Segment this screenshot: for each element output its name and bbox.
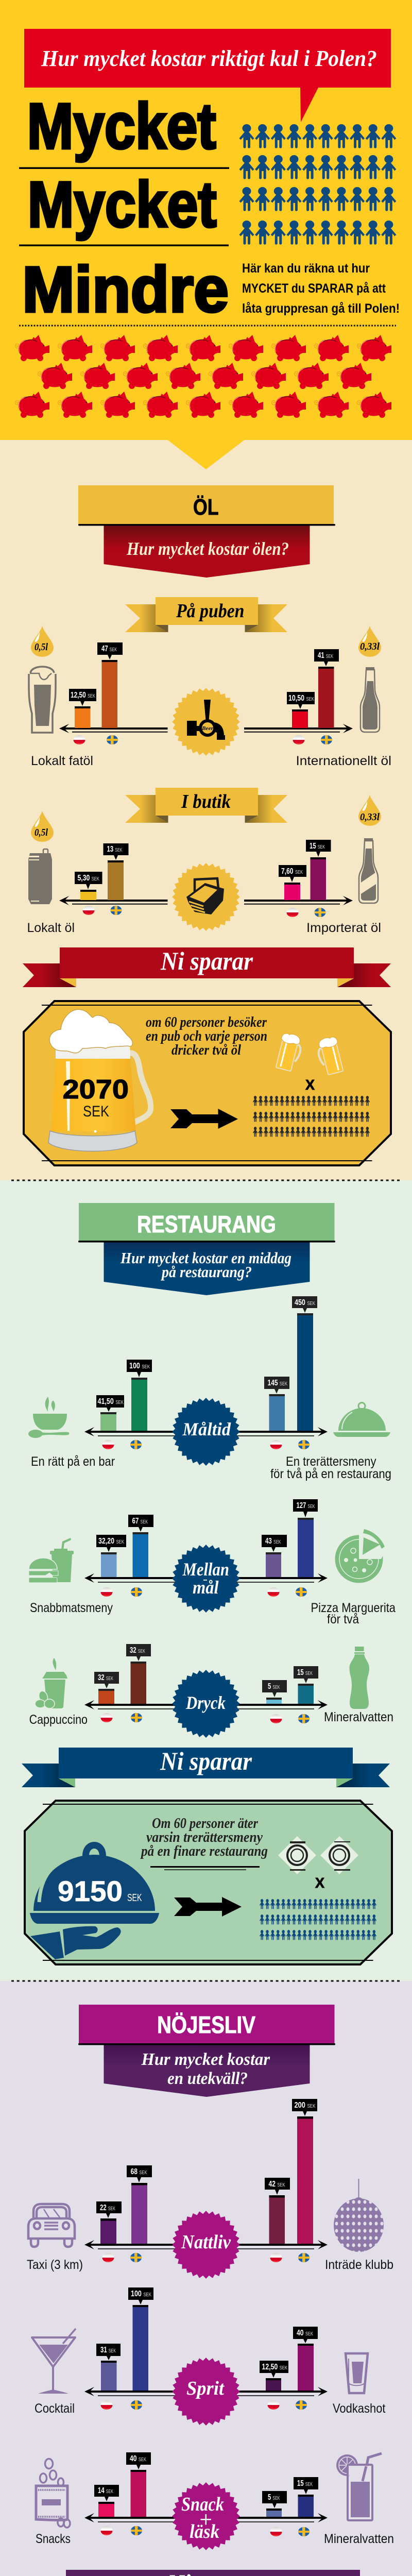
chart: Mellanmål xyxy=(29,1499,396,1626)
label: Inträde klubb: Inträde klubb xyxy=(325,2258,393,2272)
bar: taxi Polen 22 SEK: 22 SEK xyxy=(100,2204,115,2212)
bar: lokalt fatöl Sverige 47 SEK xyxy=(97,642,123,728)
bar: snacks Polen 14 SEK: 14 SEK xyxy=(98,2486,113,2495)
label: Internationellt öl: Internationellt öl xyxy=(296,754,391,768)
bar: lokalt öl Polen 5,30 SEK: 5,30 SEK xyxy=(77,874,99,883)
flags: Mellanmål xyxy=(101,1587,307,1597)
icon: waiter hand with cloche xyxy=(30,1842,159,1959)
chart: Dryck xyxy=(29,1644,393,1738)
ribbon: Ni sparar beer xyxy=(23,946,391,987)
bar: cocktail Polen 31 SEK: 31 SEK xyxy=(100,2346,116,2354)
icon: cocktail glass xyxy=(32,2329,76,2394)
badge: Snack + läsk: Snack xyxy=(181,2494,224,2515)
bar: importerat öl Sverige 15 SEK xyxy=(306,840,331,900)
bar: vodkashot Polen 12,50 SEK xyxy=(260,2361,288,2391)
axis: shop chart xyxy=(59,896,353,905)
badge: Sprit xyxy=(172,2358,240,2426)
question ribbon: nightlife: Hur mycket kostar xyxy=(141,2050,270,2069)
icon: burger and drink xyxy=(29,1538,74,1583)
bar: importerat öl Polen 7,60 SEK xyxy=(279,865,306,900)
bar: cocktail Sverige 100 SEK xyxy=(128,2287,153,2391)
badge: Nattliv xyxy=(172,2211,240,2279)
ribbon: Ni sparar beer: Ni sparar xyxy=(160,946,253,975)
chart: Sprit xyxy=(32,2287,386,2426)
label: En trerättersmeny för två xyxy=(270,1454,391,1481)
badge: Måltid: Måltid xyxy=(182,1419,231,1439)
question ribbon: beer: Hur mycket kostar ölen? xyxy=(126,538,289,559)
badge: Måltid xyxy=(172,1398,240,1466)
bar: mineralvatten Polen 5 SEK: 5 SEK xyxy=(268,1682,280,1691)
badge: Mellanmål: Mellan xyxy=(182,1559,229,1580)
bar: cappuccino Sverige 32 SEK: 32 SEK xyxy=(130,1646,145,1655)
explanation text xyxy=(140,1815,268,1859)
icon: cloche xyxy=(333,1402,390,1437)
bar: lokalt fatöl Sverige 47 SEK: 47 SEK xyxy=(101,645,117,653)
multiplier x: X xyxy=(305,1077,315,1093)
multiplier x: X xyxy=(315,1875,324,1891)
label: Taxi (3 km): Taxi (3 km) xyxy=(27,2258,83,2272)
main headline: Mindre xyxy=(22,254,229,326)
drop: 0,5 l xyxy=(31,626,54,657)
flags: Snack xyxy=(101,2526,310,2536)
question ribbon: nightlife: en utekväll? xyxy=(167,2069,248,2088)
intro text xyxy=(242,261,400,316)
section header: ÖL xyxy=(78,485,335,526)
badge: Mellanmål xyxy=(172,1545,240,1613)
explanation text: varsin trerättersmeny xyxy=(146,1829,263,1845)
bar: cocktail Sverige 100 SEK: 100 SEK xyxy=(131,2290,151,2298)
background: green restaurant section xyxy=(0,1180,412,1981)
bar: mineralvatten Polen 5 SEK xyxy=(262,1680,287,1704)
drop: 0,33 l xyxy=(358,626,381,657)
people: 66 persons xyxy=(260,1899,376,1940)
section header: RESTAURANG: RESTAURANG xyxy=(137,1211,276,1238)
flags: Sprit xyxy=(101,2400,307,2410)
bar: internationellt öl Sverige 41 SEK xyxy=(314,649,339,728)
bar: internationellt öl Polen 10,50 SEK: 10,50 SEK xyxy=(288,694,314,703)
drop: 0,33 l: 0,33l xyxy=(360,641,380,652)
label: Lokalt fatöl: Lokalt fatöl xyxy=(31,754,93,768)
bar: klubb Sverige 200 SEK xyxy=(292,2099,317,2244)
label: Pizza Marguerita för två xyxy=(311,1601,396,1626)
bar: importerat öl Sverige 15 SEK: 15 SEK xyxy=(310,842,325,851)
badge: Mellanmål: mål xyxy=(193,1577,218,1598)
bar: cocktail Polen 31 SEK xyxy=(96,2344,121,2391)
question ribbon: beer xyxy=(104,526,310,578)
bar: cappuccino Polen 32 SEK: 32 SEK xyxy=(98,1673,113,1682)
bar: klubb Polen 42 SEK xyxy=(265,2178,290,2244)
bar: snacks Sverige 40 SEK: 40 SEK xyxy=(130,2454,146,2463)
bar: lokalt fatöl Polen 12,50 SEK: 12,50 SEK xyxy=(71,691,95,700)
section header: NÖJESLIV: NÖJESLIV xyxy=(157,2011,255,2038)
bar: internationellt öl Polen 10,50 SEK xyxy=(287,692,315,728)
bar: en rätt Polen 41,50 SEK: 41,50 SEK xyxy=(98,1397,124,1406)
bar: cappuccino Sverige 32 SEK xyxy=(126,1644,151,1704)
icon: water bottle xyxy=(349,1647,369,1709)
bar: pizza Sverige 127 SEK xyxy=(293,1499,318,1577)
intro text: Här kan du räkna ut hur xyxy=(242,261,370,276)
icon: bottle xyxy=(360,667,380,732)
panel: beer savings xyxy=(24,1001,391,1165)
icon: taxi car xyxy=(28,2204,75,2247)
bar: vodkashot Sverige 40 SEK: 40 SEK xyxy=(297,2329,313,2337)
badge: Snack + läsk: läsk xyxy=(190,2521,219,2543)
speech bubble title: Hur mycket kostar riktigt kul i Polen? xyxy=(41,46,377,71)
bar: snabbmat Sverige 67 SEK xyxy=(128,1515,153,1577)
bar: cappuccino Polen 32 SEK xyxy=(94,1672,119,1704)
bar: mineralvatten Polen 5 SEK: 5 SEK xyxy=(268,2493,280,2502)
icon: coffee cup and beans xyxy=(35,1658,67,1708)
explanation text: en pub och varje person xyxy=(146,1028,267,1044)
icon: beer can xyxy=(28,849,52,904)
ribbon: Ni sparar restaurant xyxy=(22,1747,390,1787)
drop: 0,5 l shop xyxy=(31,811,54,842)
bar: trerätters Sverige 450 SEK xyxy=(292,1296,317,1431)
bar: pizza Sverige 127 SEK: 127 SEK xyxy=(297,1501,315,1510)
background: cream beer section xyxy=(0,440,412,1180)
people: 66 persons xyxy=(253,1096,370,1137)
label: Snabbmatsmeny: Snabbmatsmeny xyxy=(30,1601,113,1615)
badge: Sprit: Sprit xyxy=(186,2378,225,2399)
bar: importerat öl Polen 7,60 SEK: 7,60 SEK xyxy=(281,867,303,876)
drop: 0,5 l: 0,5l xyxy=(35,641,48,653)
ribbon: På puben xyxy=(125,597,287,632)
badge: shopping basket xyxy=(172,863,240,931)
badge: Dryck: Dryck xyxy=(185,1692,226,1713)
explanation text: om 60 personer besöker xyxy=(146,1014,267,1030)
bar: mineralvatten Sverige 15 SEK xyxy=(294,1666,318,1704)
explanation text: på en finare restaurang xyxy=(140,1843,268,1859)
background: lavender nightlife section xyxy=(0,1981,412,2576)
flags: Måltid xyxy=(102,1440,310,1449)
label: En trerättersmeny för två: för två på en restaurang xyxy=(270,1467,391,1481)
main headline: Mycket xyxy=(28,169,216,241)
bar: en rätt Sverige 100 SEK: 100 SEK xyxy=(129,1362,150,1370)
icon: big beer mug xyxy=(48,1009,151,1151)
question ribbon: restaurant: Hur mycket kostar en middag xyxy=(120,1249,291,1267)
icon: two plates xyxy=(278,1836,358,1874)
bar: internationellt öl Sverige 41 SEK: 41 SEK xyxy=(318,651,333,660)
ribbon: I butik xyxy=(125,788,287,823)
section header: NÖJESLIV xyxy=(78,2005,335,2045)
icon: clinking mugs xyxy=(274,1032,345,1076)
bar: lokalt öl Polen 5,30 SEK xyxy=(75,872,102,900)
bar: klubb Polen 42 SEK: 42 SEK xyxy=(269,2180,285,2189)
label: Cocktail: Cocktail xyxy=(35,2401,75,2416)
bar: snacks Polen 14 SEK xyxy=(94,2485,119,2517)
label: En rätt på en bar: En rätt på en bar xyxy=(31,1454,115,1469)
intro text: MYCKET du SPARAR på att xyxy=(242,281,386,296)
bar: lokalt öl Sverige 13 SEK: 13 SEK xyxy=(107,845,123,854)
bar: lokalt öl Sverige 13 SEK xyxy=(103,843,129,900)
badge: Snack + läsk xyxy=(172,2482,240,2550)
people grid: 40 travellers xyxy=(239,124,396,245)
background: yellow top section xyxy=(0,0,412,440)
explanation text: dricker två öl xyxy=(171,1042,241,1058)
flags: shop chart xyxy=(82,906,325,917)
bar: pizza Polen 43 SEK: 43 SEK xyxy=(265,1537,281,1546)
label: Mineralvatten: Mineralvatten xyxy=(324,2532,394,2546)
bar: vodkashot Sverige 40 SEK xyxy=(293,2327,318,2391)
panel: restaurant savings xyxy=(25,1801,392,1964)
flags: Nattliv xyxy=(102,2253,310,2262)
piggy banks xyxy=(15,335,391,418)
arrow xyxy=(174,1897,242,1917)
question ribbon: restaurant xyxy=(104,1243,310,1295)
chart: Nattliv xyxy=(27,2099,393,2279)
drop: 0,33 l shop xyxy=(358,795,381,826)
ribbon: I butik: I butik xyxy=(181,791,231,812)
badge: beer tap: Beer xyxy=(201,725,214,732)
arrow xyxy=(170,1109,238,1129)
icon: imported beer bottle xyxy=(359,838,378,903)
label: Vodkashot: Vodkashot xyxy=(333,2401,386,2416)
question ribbon: restaurant: på restaurang? xyxy=(160,1263,252,1281)
bar: en rätt Sverige 100 SEK xyxy=(127,1360,152,1431)
amount: 2070 SEK: 2070 xyxy=(63,1075,129,1105)
label: Snacks: Snacks xyxy=(36,2532,71,2546)
drop: 0,5 l shop: 0,5l xyxy=(35,827,48,838)
amount: 9150 SEK: SEK xyxy=(127,1892,142,1904)
label: Importerat öl: Importerat öl xyxy=(306,921,381,935)
ribbon: Ni sparar nightlife xyxy=(29,2569,397,2576)
question ribbon: nightlife xyxy=(104,2045,310,2097)
bar: trerätters Sverige 450 SEK: 450 SEK xyxy=(295,1298,315,1307)
label: Mineralvatten: Mineralvatten xyxy=(324,1710,393,1724)
icon: beer glass xyxy=(29,667,56,733)
icon: snack bag xyxy=(36,2459,70,2528)
bar: taxi Polen 22 SEK xyxy=(96,2201,122,2244)
label: Lokalt öl: Lokalt öl xyxy=(27,921,75,935)
bar: en rätt Polen 41,50 SEK xyxy=(96,1395,124,1431)
bar: mineralvatten Sverige 15 SEK xyxy=(294,2477,318,2517)
bar: mineralvatten Polen 5 SEK xyxy=(262,2491,287,2517)
flags: pub chart xyxy=(73,735,332,744)
bar: lokalt fatöl Polen 12,50 SEK xyxy=(69,689,96,728)
bar: mineralvatten Sverige 15 SEK: 15 SEK xyxy=(297,1668,313,1677)
main headline: Mycket xyxy=(27,91,216,162)
bar: vodkashot Polen 12,50 SEK: 12,50 SEK xyxy=(262,2363,287,2371)
ribbon: Ni sparar restaurant: Ni sparar xyxy=(160,1747,252,1775)
section header: RESTAURANG xyxy=(78,1203,335,1243)
axis: pub chart xyxy=(59,724,353,733)
badge: Nattliv: Nattliv xyxy=(181,2231,231,2253)
bar: klubb Sverige 200 SEK: 200 SEK xyxy=(295,2101,316,2110)
icon: glass with lemon xyxy=(336,2453,382,2520)
label: Cappuccino: Cappuccino xyxy=(29,1713,88,1727)
bar: snabbmat Polen 32,20 SEK xyxy=(96,1535,126,1577)
yellow pointer down xyxy=(168,440,244,469)
bar: trerätters Polen 145 SEK: 145 SEK xyxy=(268,1379,287,1387)
explanation text xyxy=(146,1014,267,1058)
badge: Dryck xyxy=(172,1670,240,1738)
bar: snabbmat Polen 32,20 SEK: 32,20 SEK xyxy=(98,1537,124,1546)
icon: shot glass xyxy=(346,2353,368,2393)
chart: Snack + läsk xyxy=(36,2452,394,2550)
section header: ÖL: ÖL xyxy=(193,495,218,520)
drop: 0,33 l shop: 0,33l xyxy=(360,811,380,823)
icon: soup bowl xyxy=(28,1397,69,1438)
ribbon: På puben: På puben xyxy=(176,600,244,622)
label: Pizza Marguerita för två: för två xyxy=(327,1612,359,1626)
icon: pizza xyxy=(336,1529,391,1582)
amount: 2070 SEK xyxy=(63,1075,129,1120)
bar: snacks Sverige 40 SEK xyxy=(126,2452,151,2517)
bar: trerätters Polen 145 SEK xyxy=(264,1377,289,1431)
explanation text: Om 60 personer äter xyxy=(152,1815,259,1832)
label: Pizza Marguerita för två: Pizza Marguerita xyxy=(311,1601,396,1615)
main headline xyxy=(19,91,229,326)
bar: taxi Sverige 68 SEK: 68 SEK xyxy=(131,2167,147,2176)
icon: disco ball xyxy=(334,2179,384,2252)
amount: 9150 SEK: 9150 xyxy=(58,1875,123,1907)
flags: Dryck xyxy=(101,1713,310,1723)
label: En trerättersmeny för två: En trerättersmeny xyxy=(286,1454,376,1469)
speech bubble title xyxy=(24,29,391,122)
badge: beer tap xyxy=(172,688,240,756)
chart: Måltid xyxy=(28,1296,391,1481)
bar: pizza Polen 43 SEK xyxy=(262,1535,287,1577)
bar: snabbmat Sverige 67 SEK: 67 SEK xyxy=(132,1517,148,1526)
bar: taxi Sverige 68 SEK xyxy=(127,2165,152,2244)
amount: 2070 SEK: SEK xyxy=(83,1103,109,1120)
bar: mineralvatten Sverige 15 SEK: 15 SEK xyxy=(297,2479,313,2488)
